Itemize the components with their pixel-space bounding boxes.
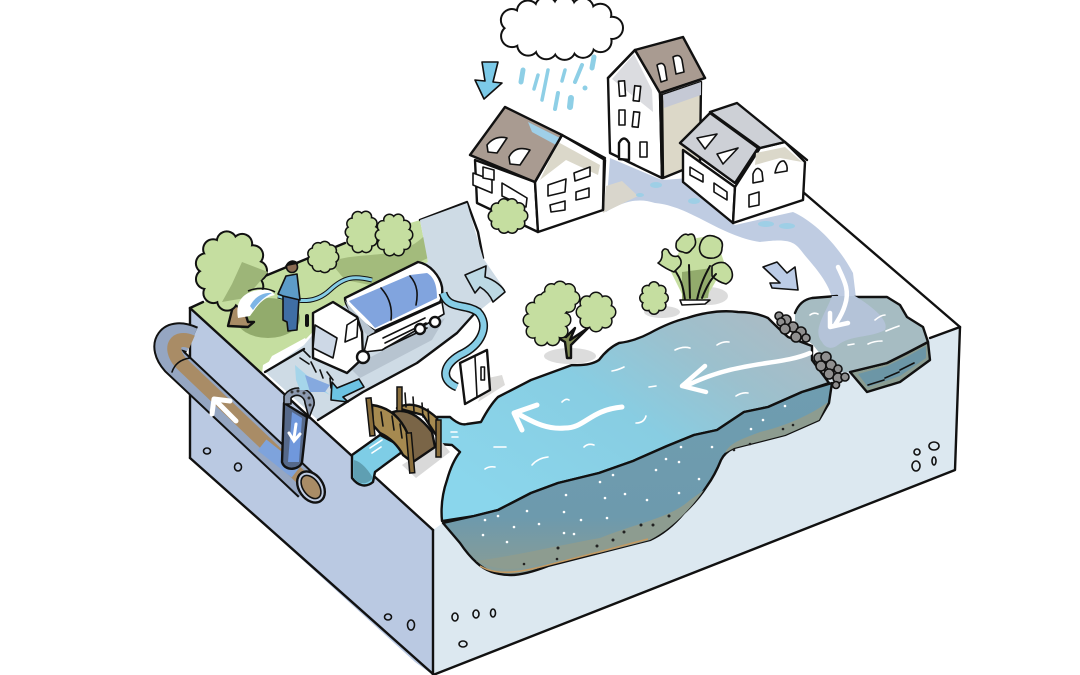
- cloud: [508, 7, 612, 49]
- footbridge: [366, 387, 450, 478]
- wall windows: [690, 161, 787, 207]
- runoff stream from houses: [603, 158, 856, 298]
- house right: [680, 103, 807, 223]
- head: [286, 262, 298, 272]
- tanker truck: [305, 262, 445, 378]
- bush by house: [494, 204, 522, 228]
- central tree: [530, 288, 609, 364]
- sediment: [476, 490, 704, 569]
- white bubbles: [482, 405, 786, 543]
- arrow: flow to drain: [331, 379, 364, 402]
- bush large: [381, 219, 407, 251]
- arrow: downstream river flow: [514, 405, 622, 430]
- top surface edges: [190, 192, 960, 530]
- upstream pond: [795, 267, 930, 392]
- river surface: [437, 311, 829, 521]
- legs: [283, 296, 299, 331]
- torso: [278, 274, 300, 300]
- arrow: upstream river flow: [682, 353, 810, 392]
- gable windows: [619, 56, 684, 157]
- cab: [313, 302, 363, 373]
- house windows: [473, 167, 590, 212]
- rain: [521, 57, 594, 109]
- wheels: [357, 351, 369, 363]
- door: [619, 138, 629, 160]
- bush small: [313, 247, 333, 267]
- small bush: [644, 287, 680, 318]
- rocks upper: [775, 312, 810, 342]
- vertical drain pipe: [282, 388, 314, 469]
- road: [265, 203, 505, 420]
- roof triangle windows: [697, 134, 738, 164]
- tree on lawn: [205, 241, 268, 327]
- roof windows: [487, 137, 507, 153]
- hose: [278, 278, 372, 301]
- right soil face: [433, 327, 960, 675]
- arrow: rain downward: [475, 62, 502, 99]
- water jet: [237, 290, 275, 318]
- truck frame: [364, 302, 444, 352]
- pipe flange end: [291, 466, 331, 508]
- control cabinet: [460, 350, 505, 404]
- rocks lower: [814, 352, 849, 388]
- person with hose: [237, 261, 372, 331]
- lawn with trees: [190, 202, 483, 374]
- bush middle: [351, 216, 373, 248]
- culvert outlet: [352, 435, 402, 485]
- arrow: white runoff flow: [830, 267, 848, 327]
- ripples: [451, 342, 748, 469]
- left soil face: [190, 308, 433, 675]
- white flow arrow in pipe: [212, 399, 236, 421]
- arrow: road runoff: [465, 266, 505, 302]
- hose to cabinet: [443, 293, 484, 387]
- tank: [345, 262, 442, 331]
- house left: [470, 107, 605, 232]
- truck spray and arrow: [295, 350, 364, 402]
- dark pebbles: [523, 424, 794, 565]
- shrub with fronds: [658, 234, 732, 305]
- arrow: roof to river: [763, 262, 798, 290]
- river cross-section: [443, 383, 832, 575]
- underground sewer pipe: [168, 337, 331, 508]
- tall house: [608, 37, 705, 178]
